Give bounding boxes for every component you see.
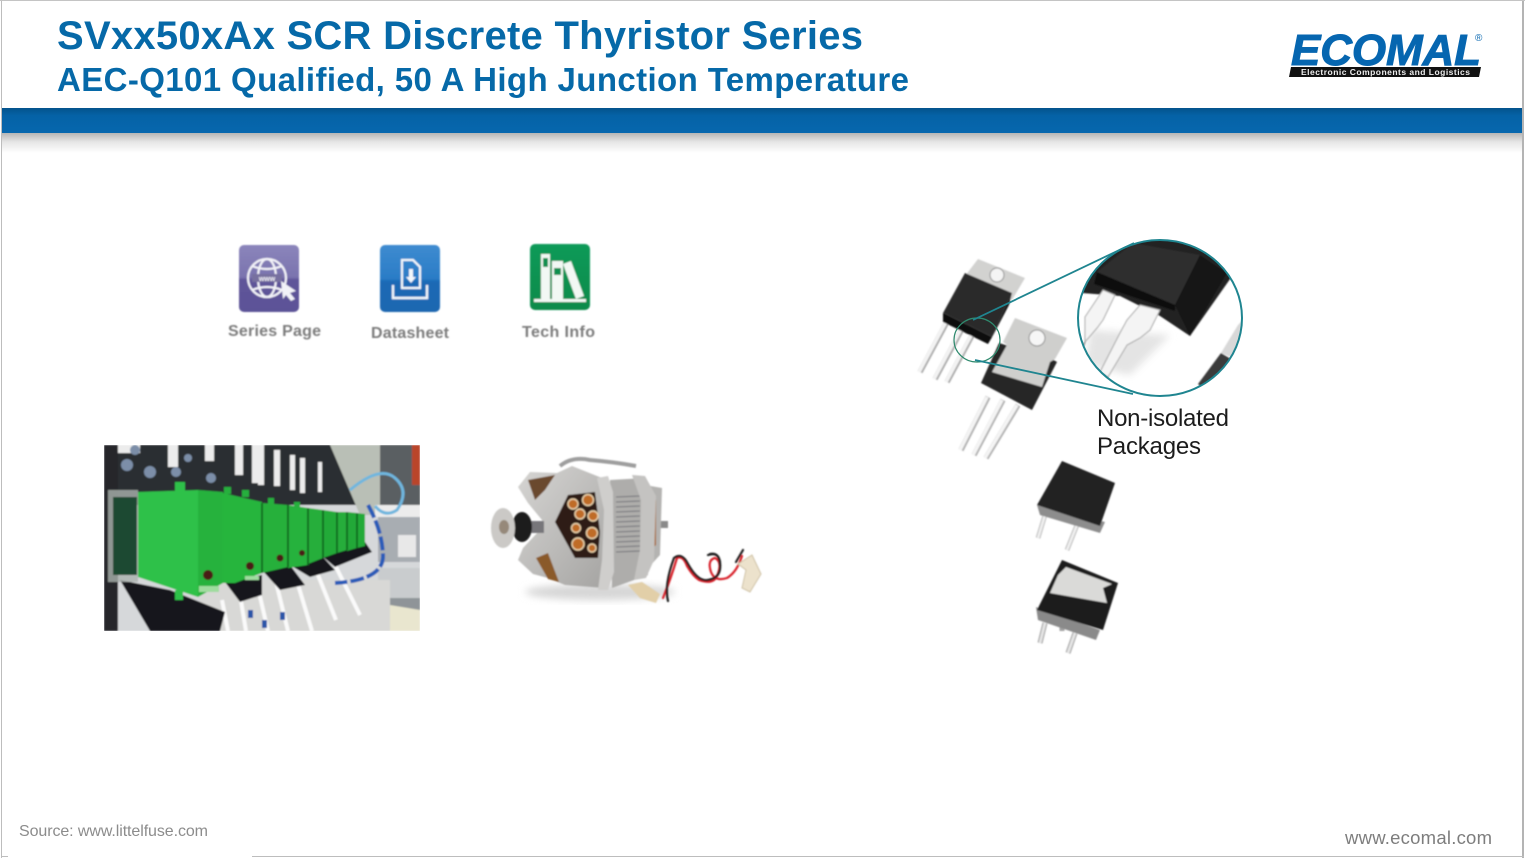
motor wires xyxy=(628,550,761,603)
header bar xyxy=(2,108,1522,153)
left bracket xyxy=(108,490,138,582)
title: SVxx50xAx SCR Discrete Thyristor Series xyxy=(57,14,863,58)
dark clips xyxy=(120,542,372,631)
icon: series page: www xyxy=(258,276,276,283)
end frame X xyxy=(518,466,612,588)
side straps xyxy=(597,476,614,590)
source note: Source: www.littelfuse.com xyxy=(19,823,208,840)
logo: ECOMAL: ® xyxy=(1475,33,1483,44)
top rod xyxy=(560,459,636,466)
label: tech info: Tech Info xyxy=(522,324,595,341)
terminal labels top xyxy=(118,445,322,493)
icon: datasheet xyxy=(380,245,440,312)
label: non-isolated packages: Non-isolated xyxy=(1097,405,1229,432)
logo: ECOMAL: ECOMAL xyxy=(1291,26,1481,75)
shaft and pulley xyxy=(530,521,544,533)
website: www.ecomal.com xyxy=(1344,827,1492,848)
transistor: surface mount front xyxy=(1037,461,1115,550)
small circle xyxy=(954,318,1000,362)
central opening xyxy=(555,492,600,558)
transistor: TO-220 front xyxy=(919,259,1025,382)
laminated core xyxy=(610,478,648,588)
connector lines xyxy=(973,243,1134,394)
magnified view xyxy=(1078,238,1248,396)
icon: series page xyxy=(239,245,299,312)
photo: electric motor xyxy=(491,459,761,603)
label: series page: Series Page xyxy=(228,323,321,340)
label: datasheet: Datasheet xyxy=(371,325,450,342)
transistor: surface mount back xyxy=(1036,560,1118,653)
logo: ECOMAL: Electronic Components and Logistics xyxy=(1301,67,1470,77)
cables bottom xyxy=(350,580,391,631)
LEDs xyxy=(203,550,305,580)
photo: green relay modules xyxy=(104,445,420,631)
second part lead xyxy=(1220,322,1241,358)
label: non-isolated packages xyxy=(1097,405,1229,460)
icon: tech info xyxy=(530,244,590,310)
blue cable xyxy=(350,474,403,513)
label: non-isolated packages: Packages xyxy=(1097,433,1201,460)
subtitle: AEC-Q101 Qualified, 50 A High Junction Temperature xyxy=(57,61,909,98)
rear plate xyxy=(640,485,662,568)
transistor: TO-220 back xyxy=(960,318,1067,458)
winding openings xyxy=(528,475,555,500)
relay green bodies xyxy=(223,493,262,583)
callout: zoom lines and circles xyxy=(919,238,1248,458)
leads xyxy=(1085,290,1115,342)
shaft end xyxy=(658,521,668,528)
